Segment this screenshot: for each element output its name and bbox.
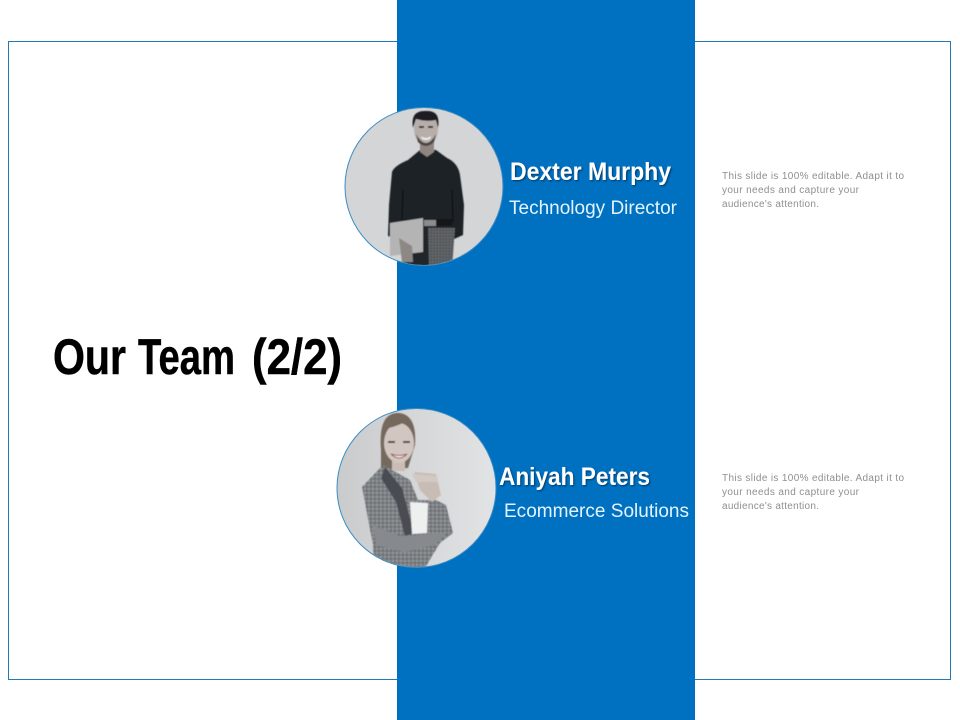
title xyxy=(53,329,342,385)
portrait: Dexter Murphy xyxy=(345,108,503,268)
description: Dexter Murphy: audience's attention. xyxy=(722,199,819,210)
title: Our xyxy=(53,329,126,385)
description: Aniyah Peters: your needs and capture your xyxy=(722,487,860,498)
description: Aniyah Peters: audience's attention. xyxy=(722,501,819,512)
role: Technology Director: Technology Director xyxy=(509,198,678,219)
title: Team xyxy=(138,329,235,385)
portrait: Aniyah Peters xyxy=(337,408,496,570)
description: Aniyah Peters: This slide is 100% editable. Adapt it to xyxy=(722,473,904,484)
description: Dexter Murphy: This slide is 100% editable. Adapt it to xyxy=(722,171,904,182)
title: (2/2) xyxy=(252,329,342,385)
blue vertical band xyxy=(397,0,695,720)
description: Dexter Murphy: your needs and capture your xyxy=(722,185,860,196)
description: Aniyah Peters xyxy=(722,473,904,512)
description: Dexter Murphy xyxy=(722,171,904,210)
role: Ecommerce Solutions: Ecommerce Solutions xyxy=(504,501,689,522)
name: Aniyah Peters: Aniyah Peters xyxy=(499,463,650,491)
name: Dexter Murphy: Dexter Murphy xyxy=(510,158,671,186)
